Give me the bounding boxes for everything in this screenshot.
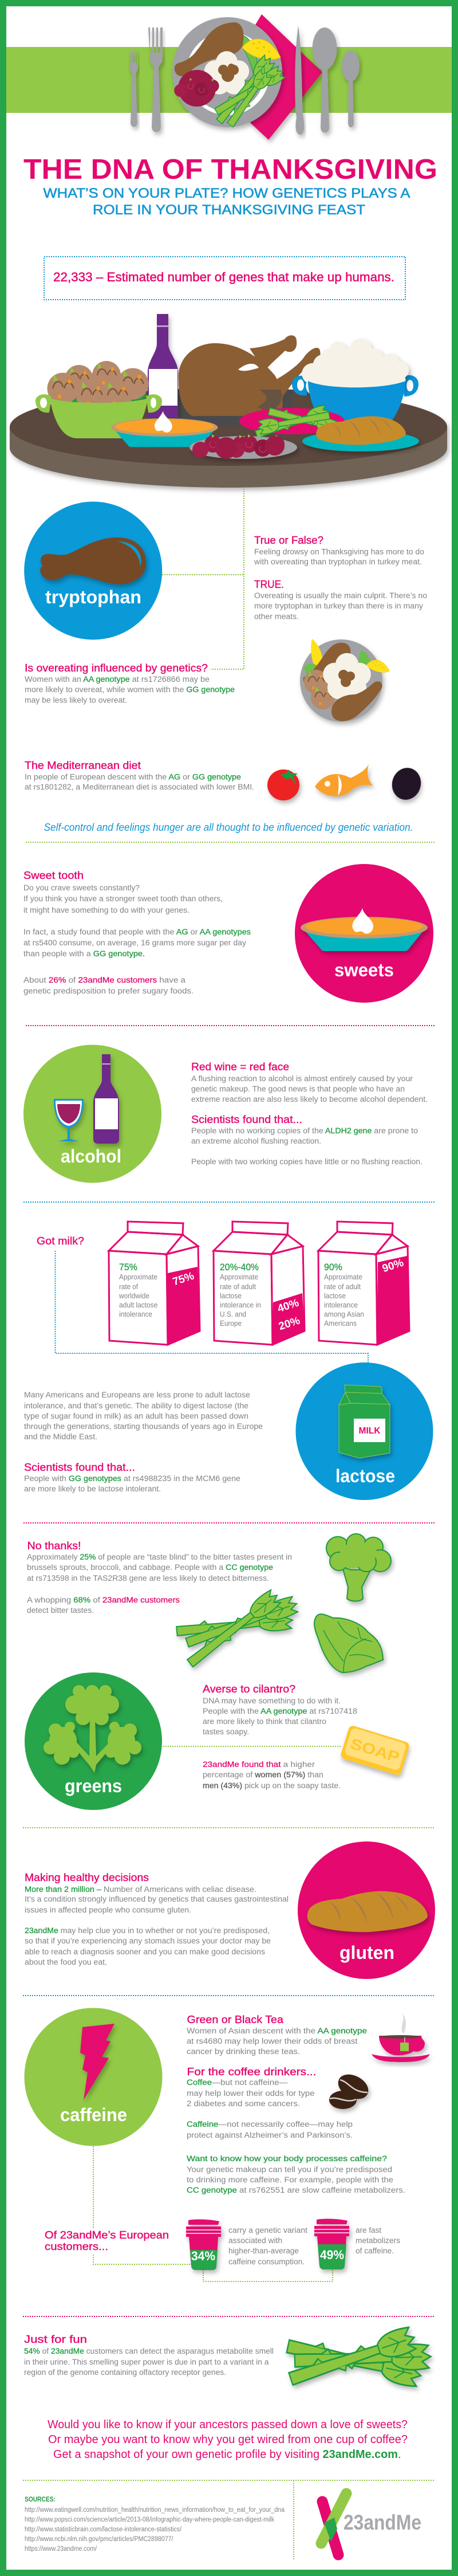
text: healthy decisions: so that if you’re experiencing any stomach issues your doctor may be (25, 1937, 271, 1945)
carton: 20 to 40 percent: U.S. and (220, 1310, 246, 1318)
carton: 75 percent: 75% (119, 1262, 137, 1273)
text: caffeine processing: to drinking more caffeine. For example, people with the (187, 2176, 393, 2184)
text: lactose paragraph: intolerance, and that’s genetic. The ability to digest lactose (the (24, 1401, 248, 1410)
text: no thanks (27, 1540, 292, 1615)
text: 34 percent: caffeine consumption. (228, 2257, 305, 2266)
callout: gene count (44, 257, 405, 300)
text: sweet tooth (23, 870, 251, 995)
carton: 20 to 40 percent: lactose (220, 1292, 242, 1300)
sources (25, 2495, 285, 2553)
green table runner band (6, 47, 452, 113)
icon: large spoon (313, 28, 337, 133)
carton: 20 to 40 percent: Europe (220, 1320, 242, 1328)
carton: 75 percent: worldwide (119, 1292, 149, 1300)
text: just for fun: 54% of 23andMe customers can detect the asparagus metabolite smell (24, 2347, 274, 2355)
carton: 75 percent: Approximate (119, 1273, 157, 1281)
text: coffee: 2 diabetes and some cancers. (187, 2099, 300, 2108)
panel: just for fun (24, 2325, 431, 2391)
badge: sweets (295, 864, 433, 1003)
text: sweet tooth: than people with a GG genotype. (23, 949, 145, 958)
title: THE DNA OF THANKSGIVING (23, 154, 437, 185)
carton: 90 percent: lactose (324, 1292, 346, 1300)
text: lactose paragraph: through the generations, starting thousands of years ago in Europe (24, 1422, 263, 1431)
text: overeating: more likely to overeat, while women with the GG genotype (25, 685, 235, 694)
badge: greens: greens (65, 1776, 122, 1796)
text: 49 percent (356, 2226, 400, 2255)
text: Mediterranean diet: at rs1801282, a Mediterranean diet is associated with lower BMI. (25, 783, 254, 791)
carton: 90 percent: 90% (381, 1257, 405, 1275)
icon: coffee beans (329, 2070, 373, 2109)
text: just for fun (24, 2334, 274, 2377)
table (10, 388, 447, 488)
text: true or false: TRUE. (254, 579, 284, 590)
icon: lettuce (314, 1614, 383, 1672)
badge: lactose (295, 1362, 433, 1500)
icon: fish (315, 764, 373, 796)
badge: caffeine (24, 2008, 163, 2146)
text: true or false: Feeling drowsy on Thanksgiving has more to do (254, 548, 424, 556)
text: no thanks: brussels sprouts, broccoli, and cabbage. People with a CC genotype (27, 1563, 273, 1572)
icon: olive (389, 764, 424, 803)
text: tea (187, 2014, 367, 2056)
text: true or false: more tryptophan in turkey than there is in many (254, 602, 423, 610)
carton: 75 percent: 75% (171, 1270, 196, 1288)
text: healthy decisions: Making healthy decisions (25, 1872, 149, 1883)
call to action: Get a snapshot of your own genetic profile by visiting 23andMe.com. (53, 2448, 401, 2461)
illustration: place setting (129, 14, 360, 140)
text: overeating: Women with an AA genotype at rs1726866 may be (25, 675, 210, 684)
carton: 75 percent (109, 1222, 200, 1345)
carton: 20 to 40 percent: intolerance in (220, 1301, 261, 1309)
sources: SOURCES: (25, 2495, 56, 2503)
heading: got milk: Got milk? (37, 1235, 84, 1247)
text: red wine: A flushing reaction to alcohol is almost entirely caused by your (191, 1074, 413, 1083)
text: scientists lactose: People with GG genotypes at rs4988235 in the MCM6 gene (24, 1474, 240, 1483)
text: overeating: may be less likely to overeat. (25, 696, 127, 705)
carton: 20 to 40 percent: rate of adult (220, 1283, 256, 1291)
chart: 49 percent cup (314, 2219, 349, 2269)
panel: lactose (24, 1222, 433, 1500)
text: red wine (191, 1061, 428, 1166)
sources: http://www.popsci.com/science/article/2013-08/infographic-day-where-people-can-digest-milk (25, 2516, 274, 2523)
text: healthy decisions: 23andMe may help clue you in to whether or not you’re predisposed, (25, 1926, 270, 1935)
icon: broccoli (326, 1534, 391, 1601)
connector: milk to lactose badge (55, 1251, 368, 1362)
text: no thanks: Approximately 25% of people are “taste blind” to the bitter tastes present in (27, 1553, 292, 1561)
sources: http://www.statisticbrain.com/lactose-intolerance-statistics/ (25, 2526, 182, 2533)
icon: soap (340, 1725, 410, 1776)
text: scientists lactose: Scientists found that... (24, 1462, 135, 1473)
text: tea: at rs4680 may help lower their odds of breast (187, 2037, 358, 2045)
text: true or false: Overeating is usually the main culprit. There’s no (254, 591, 427, 600)
badge: lactose: MILK (358, 1426, 381, 1436)
text: sweet tooth: About 26% of 23andMe customers have a (23, 976, 186, 984)
text: caffeine processing: Want to know how your body processes caffeine? (187, 2154, 387, 2163)
text: 34 percent: associated with (228, 2236, 282, 2245)
badge: tryptophan: tryptophan (45, 587, 141, 607)
pumpkin pie (111, 411, 218, 447)
text: red wine: genetic makeup. The good news is that people who have an (191, 1085, 405, 1093)
carton: 20 to 40 percent: 20%-40% (220, 1262, 259, 1273)
icon: small spoon (342, 50, 360, 127)
text: sweet tooth: Sweet tooth (23, 870, 84, 881)
icon: asparagus bunch (176, 1588, 300, 1671)
text: cilantro: 23andMe found that a higher (203, 1760, 315, 1769)
text: tea: Women of Asian descent with the AA genotype (187, 2027, 367, 2035)
text: Mediterranean diet: In people of European descent with the AG or GG genotype (25, 772, 241, 782)
text: Mediterranean diet (25, 760, 254, 791)
text: cilantro: tastes soapy. (203, 1727, 249, 1736)
text: coffee: may help lower their odds for type (187, 2089, 315, 2098)
illustration: feast table (10, 314, 447, 488)
text: healthy decisions: issues in affected people who consume gluten. (25, 1906, 191, 1914)
text: scientists lactose: are more likely to be lactose intolerant. (24, 1485, 161, 1493)
subtitle: WHAT’S ON YOUR PLATE? HOW GENETICS PLAYS A (44, 186, 410, 201)
text: sweet tooth: it might have something to do with your genes. (23, 906, 189, 914)
icon: tomato (267, 769, 299, 800)
text: cilantro: Averse to cilantro? (203, 1683, 295, 1695)
text: true or false: True or False? (254, 535, 323, 546)
text: red wine: extreme reaction are also less likely to become alcohol dependent. (191, 1095, 428, 1104)
text: cilantro: are more likely to think that cilantro (203, 1717, 326, 1726)
badge: lactose: lactose (335, 1466, 395, 1486)
text: sweet tooth: In fact, a study found that people with the AG or AA genotypes (23, 928, 251, 936)
text: sweet tooth: genetic predisposition to prefer sugary foods. (23, 987, 194, 995)
heading: European customers (45, 2229, 169, 2252)
text: coffee: Caffeine —not necessarily coffee—may help (187, 2120, 353, 2129)
text: healthy decisions: It’s a condition strongly influenced by genetics that causes gastrointestinal (25, 1895, 289, 1903)
carton: 75 percent: rate of (119, 1283, 138, 1291)
text: healthy decisions: able to reach a diagnosis sooner and you can make good decisions (25, 1947, 265, 1956)
carton: 20 to 40 percent (214, 1222, 305, 1345)
text: caffeine processing: CC genotype at rs762551 are slow caffeine metabolizers. (187, 2186, 405, 2194)
carton: 90 percent: intolerance (324, 1301, 358, 1309)
badge: greens (25, 1672, 162, 1810)
text: 34 percent (228, 2226, 307, 2266)
sources: http://www.eatingwell.com/nutrition_health/nutrition_news_information/how_to_eat_for_your_dna (25, 2507, 285, 2514)
text: healthy decisions: about the food you eat. (25, 1958, 107, 1966)
text: sweet tooth: If you think you have a stronger sweet tooth than others, (23, 894, 223, 903)
connector: table to tryptophan text (162, 489, 244, 669)
text: cilantro: percentage of women (57%) than (203, 1770, 323, 1779)
carton: 90 percent: Americans (324, 1320, 357, 1328)
text: sweet tooth: at rs5400 consume, on average, 16 grams more sugar per day (23, 938, 246, 947)
carton: 75 percent: intolerance (119, 1310, 152, 1318)
badge: alcohol: alcohol (61, 1146, 121, 1167)
text: true or false: other meats. (254, 612, 299, 621)
text: lactose paragraph: Many Americans and Europeans are less prone to adult lactose (24, 1391, 250, 1399)
text: just for fun: Just for fun (24, 2334, 87, 2345)
wine bottle (148, 314, 178, 418)
icon: plate with food (172, 17, 287, 129)
blue pot with mashed potatoes (292, 339, 418, 427)
text: Mediterranean diet: The Mediterranean diet (25, 760, 141, 771)
carton: 20 to 40 percent: Approximate (220, 1273, 258, 1281)
text: tea: cancer by drinking these teas. (187, 2047, 300, 2056)
text: red wine: an extreme alcohol flushing reaction. (191, 1137, 321, 1145)
sources: http://www.ncbi.nlm.nih.gov/pmc/articles/PMC2898077/ (25, 2536, 173, 2543)
logo: 23andMe: 23andMe (344, 2511, 421, 2534)
text: caffeine processing: Your genetic makeup can tell you if you’re predisposed (187, 2165, 392, 2174)
text: no thanks: at rs713598 in the TAS2R38 gene are less likely to detect bitterness. (27, 1574, 269, 1582)
text: no thanks: A whopping 68% of 23andMe customers (27, 1596, 180, 1604)
badge: gluten: gluten (339, 1942, 394, 1963)
text: just for fun: region of the genome containing olfactory receptor genes. (24, 2368, 226, 2377)
icon: small fork (129, 50, 138, 127)
panel: greens (25, 1534, 410, 1810)
icon: large fork (148, 28, 163, 132)
panel: tryptophan (24, 502, 427, 833)
logo: 23andMe (321, 2493, 421, 2555)
text: 49 percent: metabolizers (356, 2236, 400, 2245)
carton: 20 to 40 percent: 20% (277, 1315, 302, 1333)
text: lactose paragraph: type of sugar found in milk) as an adult has been passed down (24, 1412, 248, 1420)
text: healthy decisions: More than 2 million – Number of Americans with celiac disease. (25, 1885, 256, 1894)
text: red wine: Red wine = red face (191, 1061, 289, 1073)
text: coffee: For the coffee drinkers... (187, 2066, 316, 2078)
text: scientists lactose (24, 1462, 240, 1493)
green pot with stuffing (35, 361, 162, 438)
carton: 20 to 40 percent: 40% (276, 1297, 301, 1315)
text: overeating: Is overeating influenced by genetics? (25, 662, 208, 674)
icon: napkin (229, 14, 322, 140)
text: cilantro (203, 1683, 357, 1790)
connector: greens to soap (163, 1746, 342, 1747)
call to action: Or maybe you want to know why you get wired from one cup of coffee? (48, 2433, 408, 2446)
carton: 90 percent: Approximate (324, 1273, 362, 1281)
text: true or false: with overeating than tryptophan in turkey meat. (254, 557, 422, 566)
text: red wine: People with two working copies have little or no flushing reaction. (191, 1157, 423, 1166)
text: 34 percent: higher-than-average (228, 2247, 299, 2255)
text: 49 percent: are fast (356, 2226, 381, 2235)
text: just for fun: in their urine. This smelling super power is due in part to a variant in a (24, 2358, 269, 2366)
heading: European customers: Of 23andMe’s European (45, 2229, 169, 2241)
panel: caffeine (24, 2008, 430, 2282)
callout: gene count: 22,333 – Estimated number of genes that make up humans. (53, 270, 394, 284)
chart: 34 percent cup: 34% (191, 2249, 215, 2263)
text: cilantro: DNA may have something to do with it. (203, 1697, 341, 1705)
sources: https://www.23andme.com/ (25, 2546, 97, 2553)
text: lactose paragraph: and the Middle East. (24, 1432, 97, 1441)
bread on teal plate (302, 417, 419, 451)
badge: alcohol (23, 1045, 161, 1183)
text: 49 percent: of caffeine. (356, 2247, 394, 2255)
badge: caffeine: caffeine (60, 2104, 127, 2125)
carton: 90 percent: rate of adult (324, 1283, 361, 1291)
text: no thanks: No thanks! (27, 1540, 81, 1552)
icon: tea cup (372, 2013, 430, 2062)
text: sweet tooth: Do you crave sweets constantly? (23, 883, 140, 892)
carton: 90 percent (318, 1222, 409, 1345)
text: 34 percent: carry a genetic variant (228, 2226, 307, 2235)
connector: caffeine badge to cups (93, 2146, 333, 2282)
subtitle (44, 186, 410, 218)
text: red wine: People with no working copies of the ALDH2 gene are prone to (191, 1126, 418, 1135)
icon: knife (295, 26, 304, 135)
badge: sweets: sweets (334, 960, 394, 980)
icon: soap: SOAP (349, 1735, 401, 1766)
icon: asparagus (285, 2325, 431, 2391)
text: coffee: protect against Alzheimer’s and Parkinson’s. (187, 2131, 353, 2139)
turkey (179, 335, 321, 416)
text: coffee: Coffee —but not caffeine— (187, 2078, 288, 2087)
pink plate of asparagus (239, 404, 345, 441)
text: cilantro: People with the AA genotype at rs7107418 (203, 1707, 357, 1715)
chart: 49 percent cup: 49% (320, 2248, 344, 2262)
panel: alcohol (23, 1045, 428, 1183)
carton: 75 percent: adult lactose (119, 1301, 158, 1309)
text: no thanks: detect bitter tastes. (27, 1606, 94, 1615)
text: tea: Green or Black Tea (187, 2014, 284, 2025)
panel: gluten (25, 1841, 435, 1979)
text: self-control note: Self-control and feelings hunger are all thought to be influenced by genetic variation. (44, 822, 413, 833)
text: overeating (25, 662, 235, 705)
call to action (48, 2418, 408, 2461)
panel: sweets (23, 864, 433, 1003)
badge: gluten (298, 1841, 435, 1979)
call to action: Would you like to know if your ancestors passed down a love of sweets? (48, 2418, 408, 2431)
text: lactose paragraph (24, 1391, 263, 1441)
chart: 34 percent cup (186, 2220, 221, 2270)
icon: dinner plate (300, 639, 389, 722)
subtitle: ROLE IN YOUR THANKSGIVING FEAST (93, 202, 365, 218)
text: red wine: Scientists found that... (191, 1114, 302, 1125)
carton: 90 percent: 90% (324, 1262, 342, 1273)
badge: tryptophan (24, 502, 162, 639)
text: true or false (254, 535, 427, 621)
text: healthy decisions (25, 1872, 289, 1966)
carton: 90 percent: among Asian (324, 1310, 364, 1318)
text: caffeine processing (187, 2154, 405, 2194)
text: coffee (187, 2066, 353, 2139)
text: cilantro: men (43%) pick up on the soapy taste. (203, 1781, 341, 1790)
plate of cranberries (189, 434, 297, 459)
heading: European customers: customers... (45, 2241, 108, 2252)
